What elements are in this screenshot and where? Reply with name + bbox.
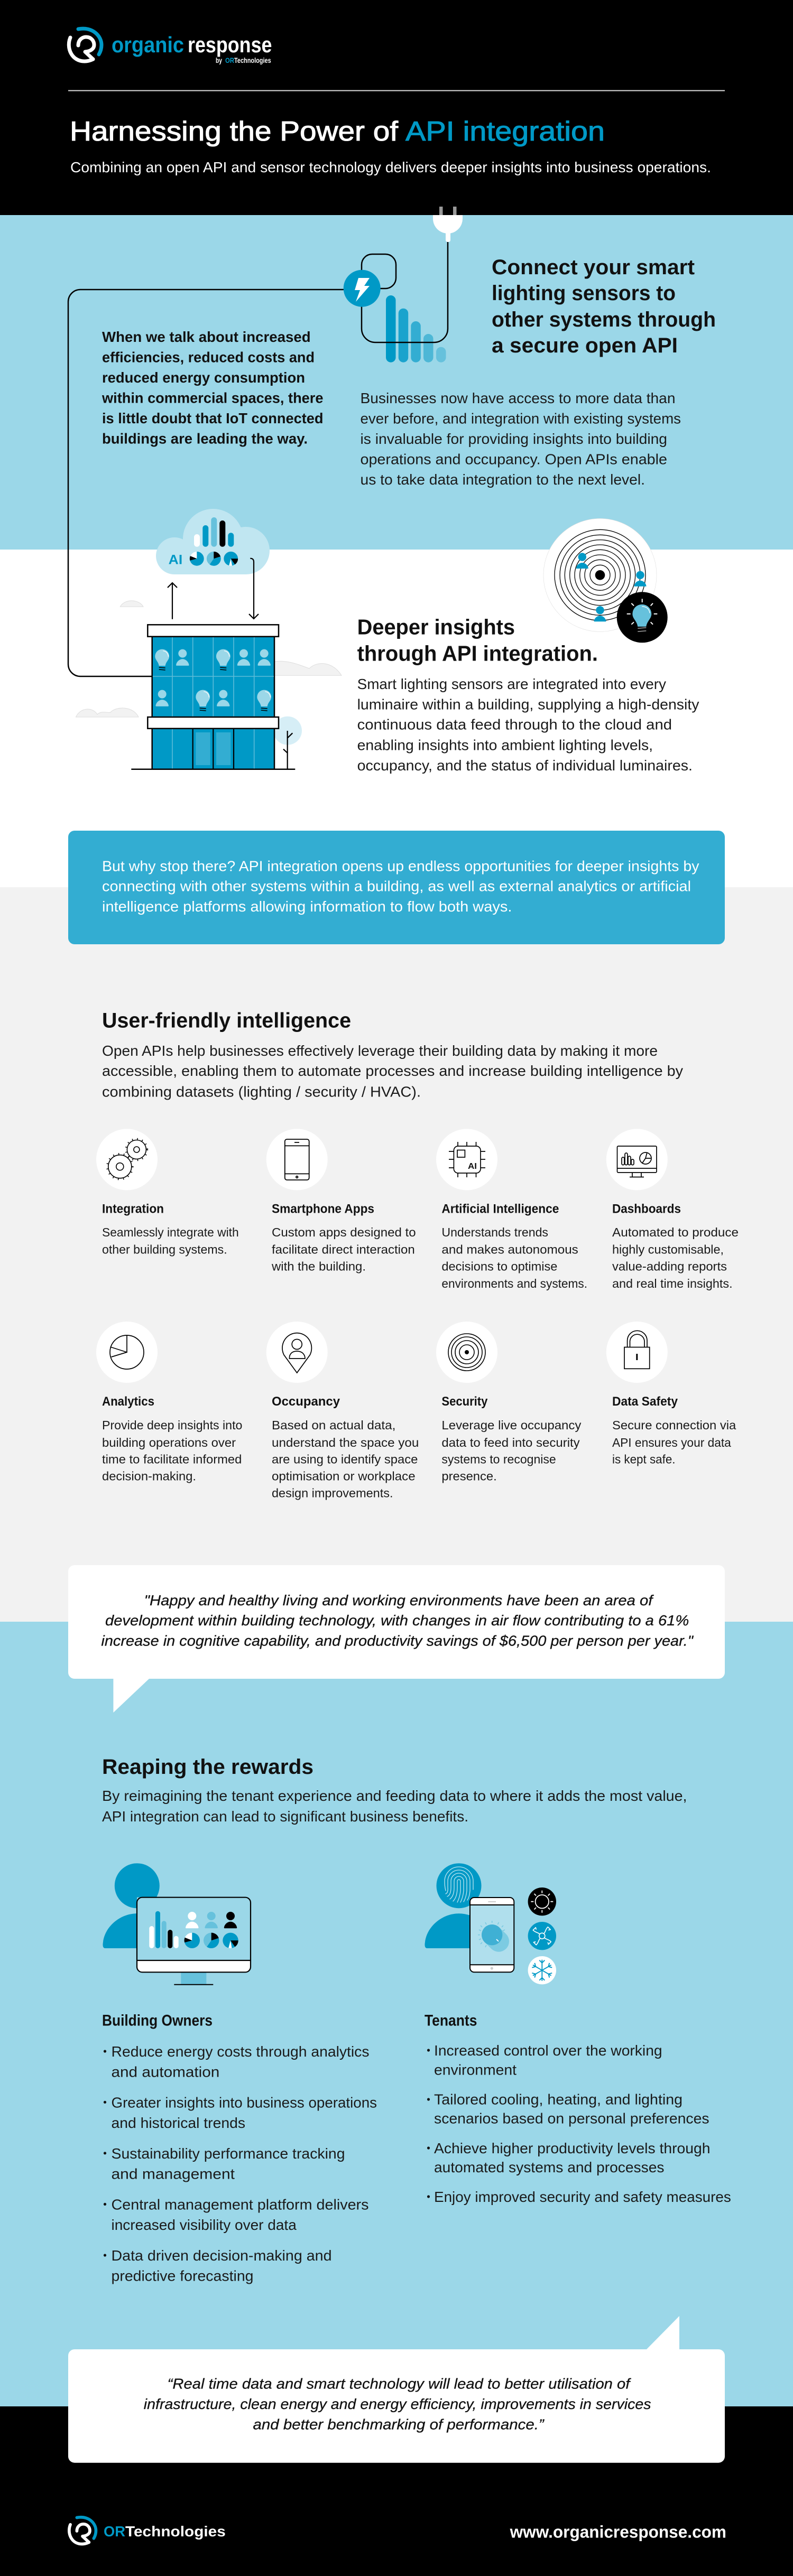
heading: deeper insights: Deeper insights bbox=[357, 615, 515, 639]
icon: location pin bbox=[282, 1333, 311, 1373]
panel: security bbox=[436, 1322, 582, 1483]
header logo bbox=[69, 29, 272, 64]
list: tenants: environment bbox=[434, 2062, 517, 2078]
panel: occupancy: optimisation or workplace bbox=[272, 1469, 416, 1483]
text block: intro bold: reduced energy consumption bbox=[102, 369, 305, 386]
text block: businesses bbox=[361, 390, 681, 488]
panel: security: Leverage live occupancy bbox=[441, 1418, 582, 1432]
panel: security: presence. bbox=[441, 1469, 497, 1483]
icon: fan badge bbox=[528, 1922, 556, 1950]
panel: dashboards: value-adding reports bbox=[612, 1260, 727, 1273]
icon: building bbox=[131, 625, 295, 769]
text block: intro bold: within commercial spaces, there bbox=[102, 390, 324, 406]
icon: pie chart bbox=[110, 1335, 144, 1369]
icon: dashboard monitor bbox=[617, 1146, 657, 1177]
panel: smartphone apps: facilitate direct interaction bbox=[272, 1243, 415, 1257]
panel: security: systems to recognise bbox=[441, 1452, 556, 1466]
icon: snowflake badge bbox=[528, 1956, 556, 1984]
subtitle: Combining an open API and sensor technology delivers deeper insights into business operations. bbox=[70, 159, 711, 175]
footer url: www.organicresponse.com bbox=[510, 2523, 726, 2542]
header logo: by bbox=[216, 56, 222, 64]
text block: reimagining bbox=[102, 1788, 687, 1825]
panel: integration bbox=[96, 1129, 239, 1257]
panel: data safety: Data Safety bbox=[612, 1394, 678, 1409]
panel: artificial intelligence: Artificial Intelligence bbox=[441, 1202, 559, 1216]
header logo: response bbox=[188, 32, 272, 57]
list: building owners: Greater insights into business operations bbox=[111, 2094, 377, 2110]
icon: padlock bbox=[624, 1331, 650, 1369]
text block: smart lighting: continuous data feed through to the cloud and bbox=[357, 717, 672, 733]
panel: dashboards: Automated to produce bbox=[612, 1225, 739, 1239]
panel: integration: Integration bbox=[102, 1202, 164, 1216]
heading: user-friendly intelligence: User-friendly intelligence bbox=[102, 1009, 351, 1032]
panel: analytics: Analytics bbox=[102, 1394, 154, 1409]
title bbox=[70, 116, 605, 147]
panel: occupancy bbox=[266, 1322, 419, 1500]
icon: AI cloud bbox=[156, 509, 270, 574]
panel: smartphone apps: with the building. bbox=[271, 1260, 366, 1273]
panel: analytics: Provide deep insights into bbox=[102, 1418, 242, 1432]
panel: occupancy: design improvements. bbox=[272, 1486, 393, 1500]
list: tenants: automated systems and processes bbox=[434, 2159, 664, 2175]
icon: brightness badge bbox=[528, 1887, 556, 1915]
panel: occupancy: Based on actual data, bbox=[272, 1418, 395, 1432]
list: building owners: and historical trends bbox=[111, 2115, 245, 2131]
panel: dashboards: Dashboards bbox=[612, 1202, 681, 1216]
list: tenants bbox=[425, 2012, 731, 2205]
panel: dashboards: and real time insights. bbox=[612, 1277, 733, 1290]
list: building owners: and management bbox=[111, 2165, 235, 2182]
header logo: organic bbox=[112, 32, 184, 57]
text block: businesses: ever before, and integration with existing systems bbox=[361, 410, 681, 427]
icon: tenant with phone bbox=[425, 1863, 514, 1972]
text block: reimagining: By reimagining the tenant experience and feeding data to where it adds the most value, bbox=[102, 1788, 687, 1804]
list: building owners: increased visibility over data bbox=[111, 2217, 297, 2233]
text block: smart lighting: Smart lighting sensors are integrated into every bbox=[357, 676, 666, 692]
panel: analytics: building operations over bbox=[102, 1436, 236, 1449]
text block: businesses: us to take data integration to the next level. bbox=[361, 471, 645, 488]
panel: artificial intelligence: decisions to optimise bbox=[441, 1260, 557, 1273]
text block: intro bold: efficiencies, reduced costs and bbox=[102, 349, 315, 366]
icon: AI chip bbox=[449, 1142, 485, 1177]
heading: deeper insights bbox=[357, 615, 598, 666]
text block: businesses: Businesses now have access to more data than bbox=[361, 390, 676, 406]
text block: intro bold: buildings are leading the way. bbox=[102, 430, 308, 447]
list: building owners: Central management platform delivers bbox=[111, 2196, 369, 2212]
list: tenants: Achieve higher productivity levels through bbox=[434, 2140, 711, 2156]
title: Harnessing the Power of bbox=[70, 116, 399, 147]
icon: tree bbox=[273, 717, 302, 769]
panel: data safety: API ensures your data bbox=[612, 1436, 731, 1449]
text block: open APIs: combining datasets (lighting / security / HVAC). bbox=[102, 1083, 421, 1100]
panel: artificial intelligence: AI bbox=[468, 1162, 477, 1171]
callout: why stop there bbox=[68, 831, 725, 944]
heading: deeper insights: through API integration. bbox=[357, 641, 598, 666]
panel: artificial intelligence: Understands trends bbox=[441, 1225, 548, 1239]
icon: fingerprint bbox=[445, 1867, 473, 1902]
heading: connect: a secure open API bbox=[492, 334, 678, 357]
callout: why stop there: intelligence platforms allowing information to flow both ways. bbox=[102, 898, 512, 915]
arrow: up to cloud bbox=[168, 583, 177, 619]
callout: quote one: development within building technology, with changes in air flow contributing to a 61% bbox=[105, 1612, 689, 1629]
text block: intro bold: is little doubt that IoT connected bbox=[102, 410, 324, 426]
list: building owners: Sustainability performance tracking bbox=[111, 2145, 345, 2162]
panel: smartphone apps: Smartphone Apps bbox=[272, 1202, 374, 1216]
text block: businesses: is invaluable for providing insights into building bbox=[361, 431, 667, 447]
title: API integration bbox=[405, 116, 605, 147]
heading: connect: Connect your smart bbox=[492, 256, 695, 279]
list: building owners: and automation bbox=[111, 2064, 219, 2080]
list: building owners bbox=[102, 2012, 377, 2284]
heading: connect: lighting sensors to bbox=[492, 282, 676, 305]
icon: target rings bbox=[448, 1334, 485, 1371]
heading: reaping the rewards: Reaping the rewards bbox=[102, 1755, 313, 1779]
list: building owners: Building Owners bbox=[102, 2012, 213, 2030]
list: building owners: predictive forecasting bbox=[111, 2267, 254, 2284]
heading: connect bbox=[492, 256, 716, 357]
footer logo: Technologies bbox=[125, 2523, 226, 2540]
list: tenants: scenarios based on personal preferences bbox=[434, 2110, 709, 2126]
callout: why stop there: But why stop there? API integration opens up endless opportunities for deeper insights by bbox=[102, 858, 699, 874]
panel: occupancy: are using to identify space bbox=[272, 1452, 418, 1466]
list: tenants: Tailored cooling, heating, and lighting bbox=[434, 2091, 683, 2108]
footer logo bbox=[69, 2517, 226, 2544]
callout: quote one bbox=[68, 1565, 725, 1713]
footer logo: OR bbox=[104, 2523, 125, 2540]
panel: artificial intelligence: and makes autonomous bbox=[441, 1243, 578, 1257]
text block: reimagining: API integration can lead to significant business benefits. bbox=[102, 1808, 468, 1825]
callout: why stop there: connecting with other systems within a building, as well as external analytics or artificial bbox=[102, 878, 691, 895]
arrow: down from cloud bbox=[249, 559, 259, 619]
callout: quote one: "Happy and healthy living and working environments have been an area of bbox=[144, 1592, 654, 1608]
panel: integration: Seamlessly integrate with bbox=[102, 1225, 239, 1239]
icon: AI cloud: AI bbox=[169, 553, 182, 568]
callout: quote two: “Real time data and smart technology will lead to better utilisation of bbox=[168, 2376, 632, 2392]
list: building owners: Data driven decision-making and bbox=[111, 2247, 332, 2264]
panel: data safety: Secure connection via bbox=[612, 1418, 736, 1432]
panel: security: data to feed into security bbox=[441, 1436, 580, 1449]
panel: smartphone apps: Custom apps designed to bbox=[272, 1225, 416, 1239]
header logo: OR bbox=[225, 56, 234, 64]
text block: businesses: operations and occupancy. Open APIs enable bbox=[361, 451, 667, 467]
text block: smart lighting: enabling insights into ambient lighting levels, bbox=[357, 737, 653, 753]
panel: occupancy: Occupancy bbox=[272, 1394, 340, 1409]
panel: artificial intelligence: environments and systems. bbox=[441, 1277, 587, 1290]
panel: analytics: time to facilitate informed bbox=[102, 1452, 242, 1466]
callout: quote two bbox=[68, 2316, 725, 2463]
list: tenants: Tenants bbox=[425, 2012, 477, 2030]
panel: dashboards: highly customisable, bbox=[612, 1243, 724, 1257]
panel: dashboards bbox=[606, 1129, 739, 1290]
connector line from hub to building bbox=[68, 290, 344, 676]
list: tenants: Enjoy improved security and safety measures bbox=[434, 2189, 731, 2205]
text block: smart lighting: occupancy, and the status of individual luminaires. bbox=[357, 757, 693, 774]
icon: smartphone bbox=[285, 1139, 309, 1180]
text block: open APIs: accessible, enabling them to automate processes and increase building intelligence by bbox=[102, 1063, 683, 1079]
panel: analytics: decision-making. bbox=[102, 1469, 196, 1483]
text block: smart lighting: luminaire within a building, supplying a high-density bbox=[357, 696, 699, 712]
panel: security: Security bbox=[441, 1394, 488, 1409]
panel: smartphone apps bbox=[266, 1129, 416, 1273]
callout: quote two: infrastructure, clean energy and energy efficiency, improvements in services bbox=[144, 2396, 651, 2412]
panel: analytics bbox=[96, 1322, 242, 1483]
list: tenants: Increased control over the working bbox=[434, 2042, 662, 2059]
text block: intro bold bbox=[102, 329, 324, 447]
callout: quote one: increase in cognitive capability, and productivity savings of $6,500 per person per year." bbox=[101, 1632, 694, 1649]
panel: artificial intelligence bbox=[436, 1129, 587, 1290]
callout: quote two: and better benchmarking of performance.” bbox=[253, 2416, 545, 2433]
text block: intro bold: When we talk about increased bbox=[102, 329, 311, 345]
panel: occupancy: understand the space you bbox=[272, 1436, 419, 1449]
heading: connect: other systems through bbox=[492, 308, 716, 331]
icon: building owner with monitor bbox=[103, 1863, 251, 1985]
panel: integration: other building systems. bbox=[102, 1243, 227, 1257]
text block: open APIs: Open APIs help businesses effectively leverage their building data by making it more bbox=[102, 1043, 658, 1059]
list: building owners: Reduce energy costs through analytics bbox=[111, 2043, 369, 2060]
icon: background clouds bbox=[76, 601, 342, 717]
icon: signal bars bbox=[386, 295, 446, 362]
header logo: Technologies bbox=[234, 56, 271, 64]
icon: power hub bbox=[344, 270, 381, 307]
text block: open APIs bbox=[102, 1043, 683, 1100]
panel: data safety bbox=[606, 1322, 736, 1466]
text block: smart lighting bbox=[357, 676, 699, 774]
icon: sensor radar bbox=[543, 518, 657, 631]
icon: light bulb badge bbox=[617, 592, 668, 643]
panel: data safety: is kept safe. bbox=[612, 1452, 676, 1466]
icon: plug and cable bbox=[362, 207, 463, 342]
icon: gears bbox=[107, 1139, 147, 1179]
